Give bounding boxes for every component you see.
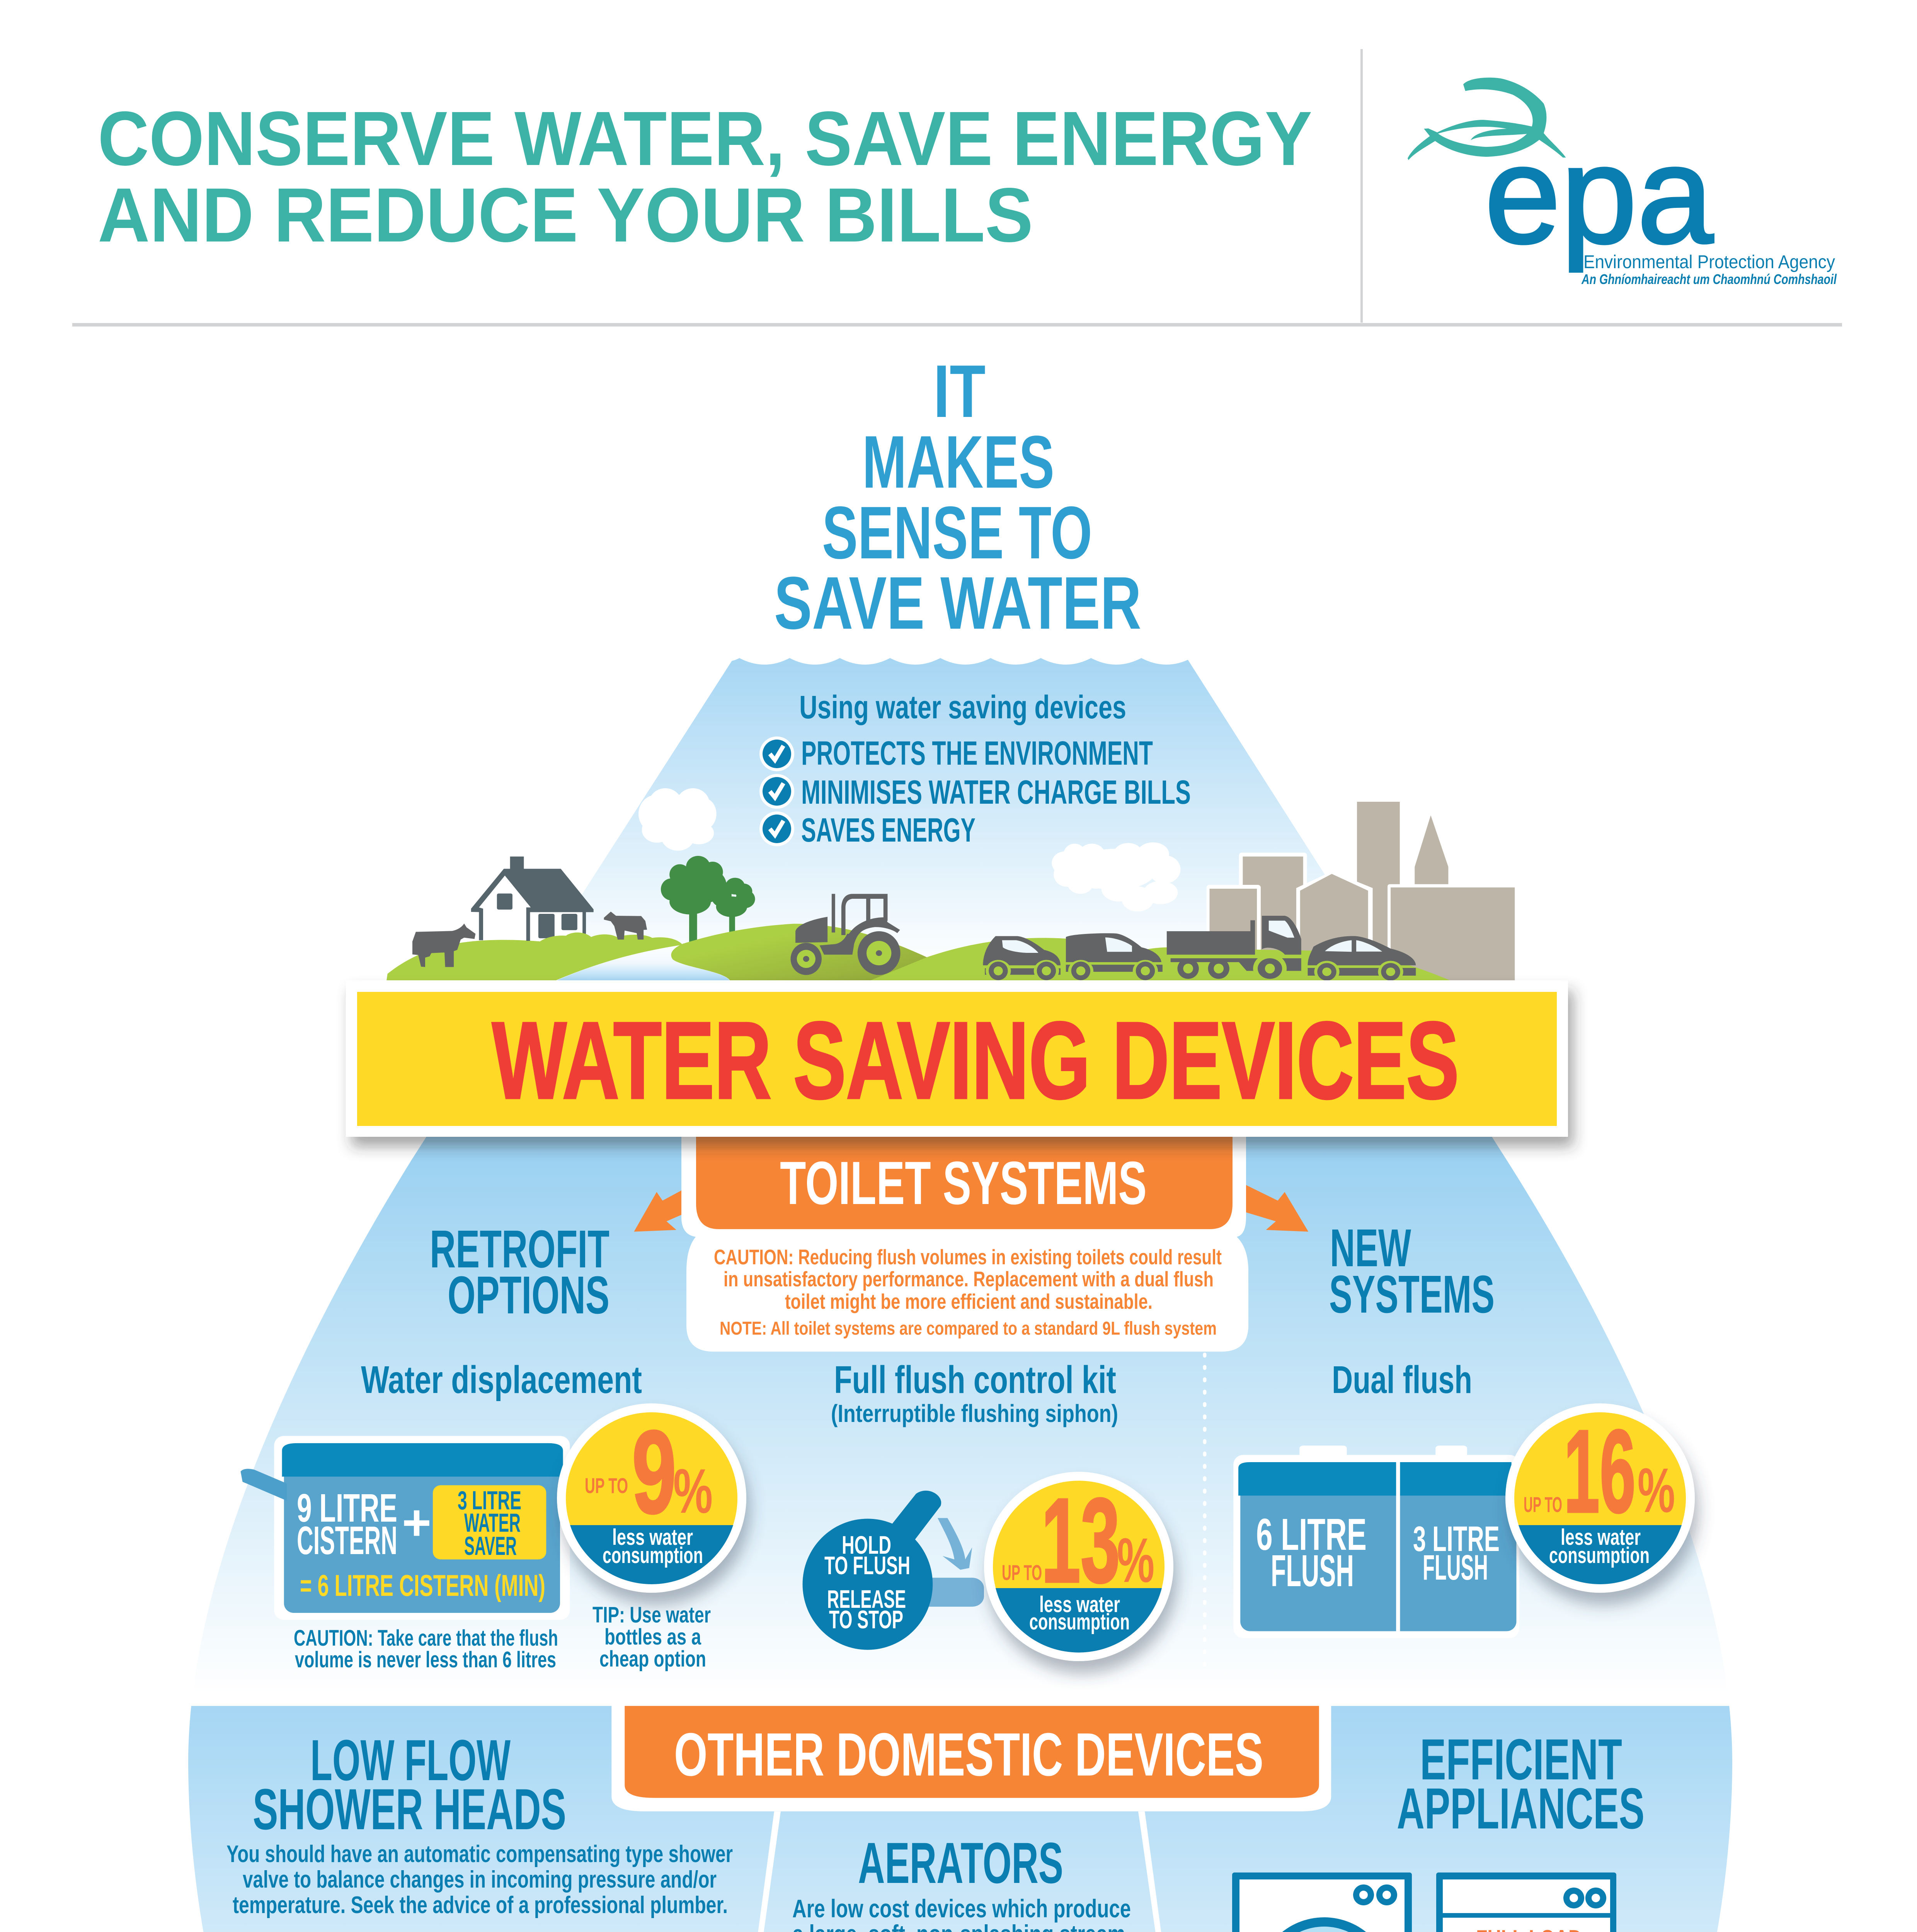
icon: vehicles [983, 916, 1416, 983]
badge: 9%: less water [612, 1525, 693, 1550]
heading: new systems [1329, 1218, 1495, 1324]
heading: it makes sense to save water: IT [933, 349, 986, 433]
icon: flush button: HOLD [842, 1531, 891, 1559]
icon: check [759, 774, 794, 809]
panel: low flow shower heads: You should have an automatic compensating type shower [226, 1841, 733, 1867]
icon: cistern: SAVER [464, 1531, 517, 1561]
title [98, 96, 1312, 258]
water drop background [155, 658, 1778, 1932]
heading: it makes sense to save water [774, 349, 1141, 645]
panel: full flush control kit: Full flush control kit [834, 1358, 1116, 1401]
heading: it makes sense to save water: SENSE TO [822, 491, 1092, 574]
panel: using water saving devices [759, 689, 1191, 849]
badge: 13%: % [1117, 1525, 1154, 1595]
banner: water saving devices [346, 980, 1568, 1137]
icon: city buildings [1207, 802, 1515, 981]
badge: 16%: % [1638, 1455, 1675, 1526]
arrow: left [634, 1180, 706, 1232]
panel: using water saving devices: MINIMISES WATER CHARGE BILLS [801, 774, 1191, 811]
caution box [681, 1121, 1248, 1352]
badge: 9%: 9 [632, 1406, 676, 1538]
title: AND REDUCE YOUR BILLS [98, 172, 1033, 258]
panel: other domestic devices [226, 1706, 1645, 1932]
title: CONSERVE WATER, SAVE ENERGY [98, 96, 1312, 182]
panel: low flow shower heads: temperature. Seek the advice of a professional plumber. [233, 1892, 728, 1918]
icon: cow left [412, 923, 475, 967]
panel: low flow shower heads: SHOWER HEADS [253, 1777, 566, 1842]
badge: 13%: less water [1039, 1592, 1120, 1617]
icon: cistern: 9 LITRE [297, 1486, 397, 1530]
heading: new systems: SYSTEMS [1329, 1265, 1495, 1324]
text: tip: TIP: Use water [592, 1602, 711, 1628]
icon: check [759, 736, 794, 771]
EPA logo: An Ghníomhaireacht um Chaomhnú Comhshaoil [1581, 271, 1837, 287]
caution box: in unsatisfactory performance. Replacement with a dual flush [724, 1267, 1214, 1291]
text: tip: cheap option [599, 1646, 706, 1672]
panel: full flush control kit: (Interruptible flushing siphon) [831, 1400, 1118, 1427]
panel: efficient appliances: APPLIANCES [1397, 1776, 1645, 1841]
icon: right cloud [1052, 842, 1180, 912]
text: cistern caution [294, 1626, 558, 1672]
icon: flush button: TO STOP [829, 1605, 903, 1634]
panel: efficient appliances: EFFICIENT [1420, 1727, 1622, 1792]
panel: dual flush [1233, 1358, 1695, 1638]
icon: dual cistern: FLUSH [1423, 1548, 1488, 1587]
icon: left cloud [638, 788, 717, 851]
heading: it makes sense to save water: MAKES [862, 420, 1054, 503]
heading: retrofit options: OPTIONS [448, 1265, 609, 1325]
badge: 13%: 13 [1041, 1473, 1120, 1607]
icon: right hill [870, 938, 1451, 981]
EPA logo [1408, 78, 1837, 287]
panel: low flow shower heads [226, 1728, 733, 1932]
panel: low flow shower heads: LOW FLOW [310, 1728, 511, 1793]
heading: other domestic devices: OTHER DOMESTIC DEVICES [674, 1721, 1263, 1789]
heading: it makes sense to save water: SAVE WATER [774, 561, 1141, 645]
badge: 16%: consumption [1549, 1543, 1650, 1568]
badge: 13%: UP TO [1002, 1560, 1042, 1585]
text: tip: bottles as a [604, 1624, 701, 1650]
heading: new systems: NEW [1330, 1218, 1411, 1278]
panel: using water saving devices: PROTECTS THE ENVIRONMENT [801, 735, 1153, 772]
panel: aerators: AERATORS [858, 1830, 1063, 1895]
icon: cistern: + [402, 1494, 431, 1551]
text: cistern caution: volume is never less than 6 litres [295, 1647, 556, 1672]
badge: 9%: UP TO [585, 1473, 628, 1498]
icon: cistern: 3 LITRE [458, 1486, 521, 1515]
icon: washing machine [1232, 1872, 1412, 1932]
icon: trees [661, 856, 755, 917]
illustration: landscape [386, 788, 1515, 983]
panel: water displacement: Water displacement [361, 1358, 642, 1401]
text: tip [592, 1602, 711, 1672]
panel: efficient appliances [1230, 1727, 1645, 1932]
EPA logo: Environmental Protection Agency [1583, 252, 1835, 272]
badge: 9% [557, 1403, 746, 1593]
heading: retrofit options [430, 1219, 609, 1325]
badge: 13%: consumption [1029, 1609, 1130, 1634]
caution box: toilet might be more efficient and sustainable. [785, 1289, 1153, 1313]
icon: cistern: = 6 LITRE CISTERN (MIN) [300, 1568, 545, 1602]
panel: water displacement [240, 1358, 746, 1672]
icon: house [471, 857, 617, 943]
badge: 16% [1505, 1403, 1695, 1593]
heading: toilet systems [696, 1121, 1233, 1229]
heading: toilet systems: TOILET SYSTEMS [780, 1149, 1147, 1217]
banner: water saving devices: WATER SAVING DEVICES [492, 999, 1459, 1121]
badge: 9%: % [673, 1456, 713, 1526]
EPA logo: epa [1485, 117, 1714, 273]
icon: dishwasher [1436, 1872, 1616, 1932]
icon: check [759, 811, 794, 846]
icon: cistern: WATER [464, 1508, 521, 1537]
icon: dual cistern: 3 LITRE [1413, 1519, 1500, 1559]
badge: 13% [984, 1472, 1173, 1661]
panel: aerators [776, 1830, 1142, 1932]
panel: low flow shower heads: valve to balance changes in incoming pressure and/or [243, 1866, 717, 1893]
arrow: right [1219, 1177, 1308, 1232]
icon: dual cistern: FLUSH [1271, 1546, 1354, 1596]
panel: using water saving devices: Using water saving devices [799, 689, 1126, 725]
panel: dual flush: Dual flush [1332, 1358, 1472, 1401]
icon: hills and river [386, 913, 928, 981]
icon: dual cistern: 6 LITRE [1256, 1509, 1367, 1560]
badge: 16%: 16 [1564, 1405, 1636, 1537]
caution box: CAUTION: Reducing flush volumes in existing toilets could result [714, 1245, 1222, 1269]
icon: flush button: TO FLUSH [824, 1551, 910, 1580]
panel: using water saving devices: SAVES ENERGY [801, 811, 976, 849]
badge: 9%: consumption [603, 1543, 703, 1568]
icon: dual cistern [1233, 1446, 1519, 1638]
badge: 16%: less water [1561, 1525, 1641, 1550]
panel: aerators: Are low cost devices which produce [792, 1894, 1131, 1923]
icon: flush button: RELEASE [827, 1585, 906, 1613]
heading: other domestic devices [611, 1706, 1331, 1811]
caution box: NOTE: All toilet systems are compared to a standard 9L flush system [720, 1318, 1217, 1339]
icon: cistern [240, 1436, 570, 1620]
icon: flush button [803, 1491, 984, 1650]
panel: full flush control kit [803, 1358, 1173, 1661]
icon: EPA swoosh [1408, 78, 1566, 160]
icon: cistern: CISTERN [297, 1518, 397, 1563]
text: cistern caution: CAUTION: Take care that the flush [294, 1626, 558, 1651]
heading: retrofit options: RETROFIT [430, 1219, 609, 1279]
badge: 16%: UP TO [1524, 1492, 1562, 1517]
icon: cow right [604, 912, 647, 940]
icon: tractor [791, 894, 901, 975]
panel: toilet systems [240, 1121, 1695, 1672]
